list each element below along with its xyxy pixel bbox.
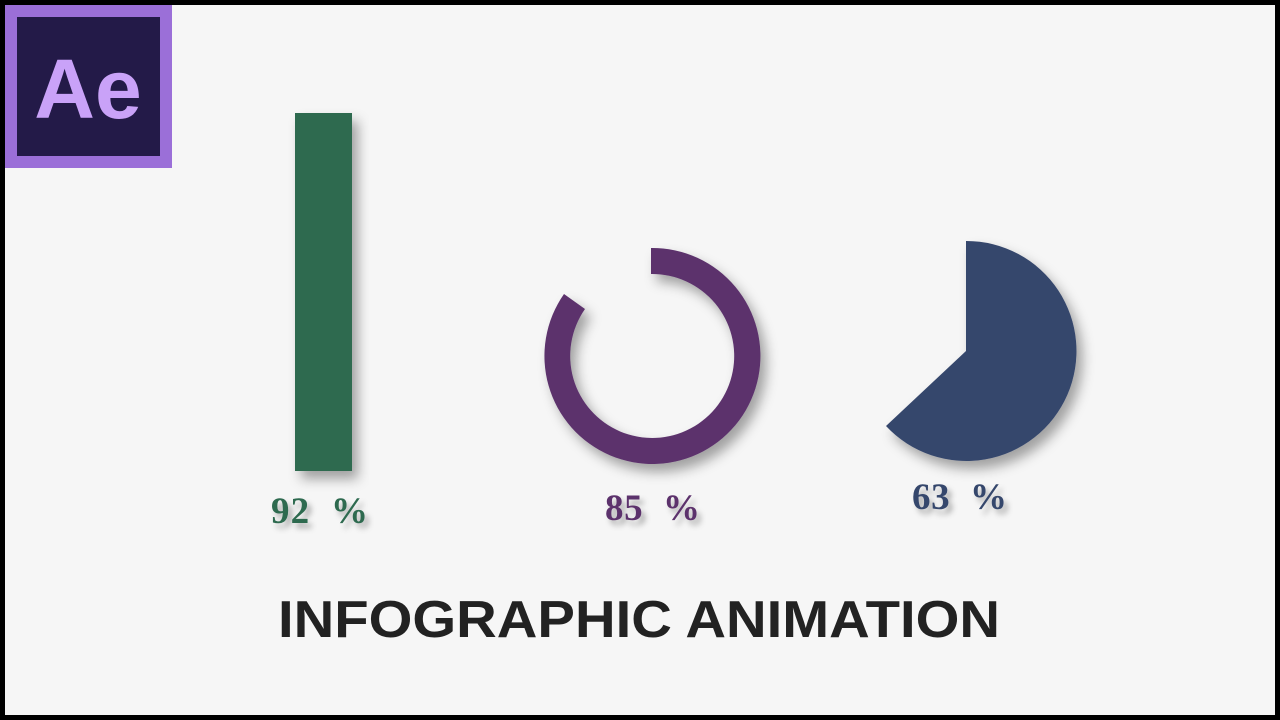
logo: Ae: Ae	[34, 42, 142, 136]
logo: Ae	[5, 5, 172, 168]
ring chart: 85%	[544, 248, 760, 464]
label: 63 %: 63 %	[912, 477, 1007, 518]
label: 85 %: 85 %	[605, 488, 700, 529]
bar chart: 92%	[295, 113, 352, 471]
title: INFOGRAPHIC ANIMATION	[278, 591, 1000, 649]
label: 92 %: 92 %	[271, 491, 368, 532]
pie chart: 63%	[886, 241, 1076, 461]
